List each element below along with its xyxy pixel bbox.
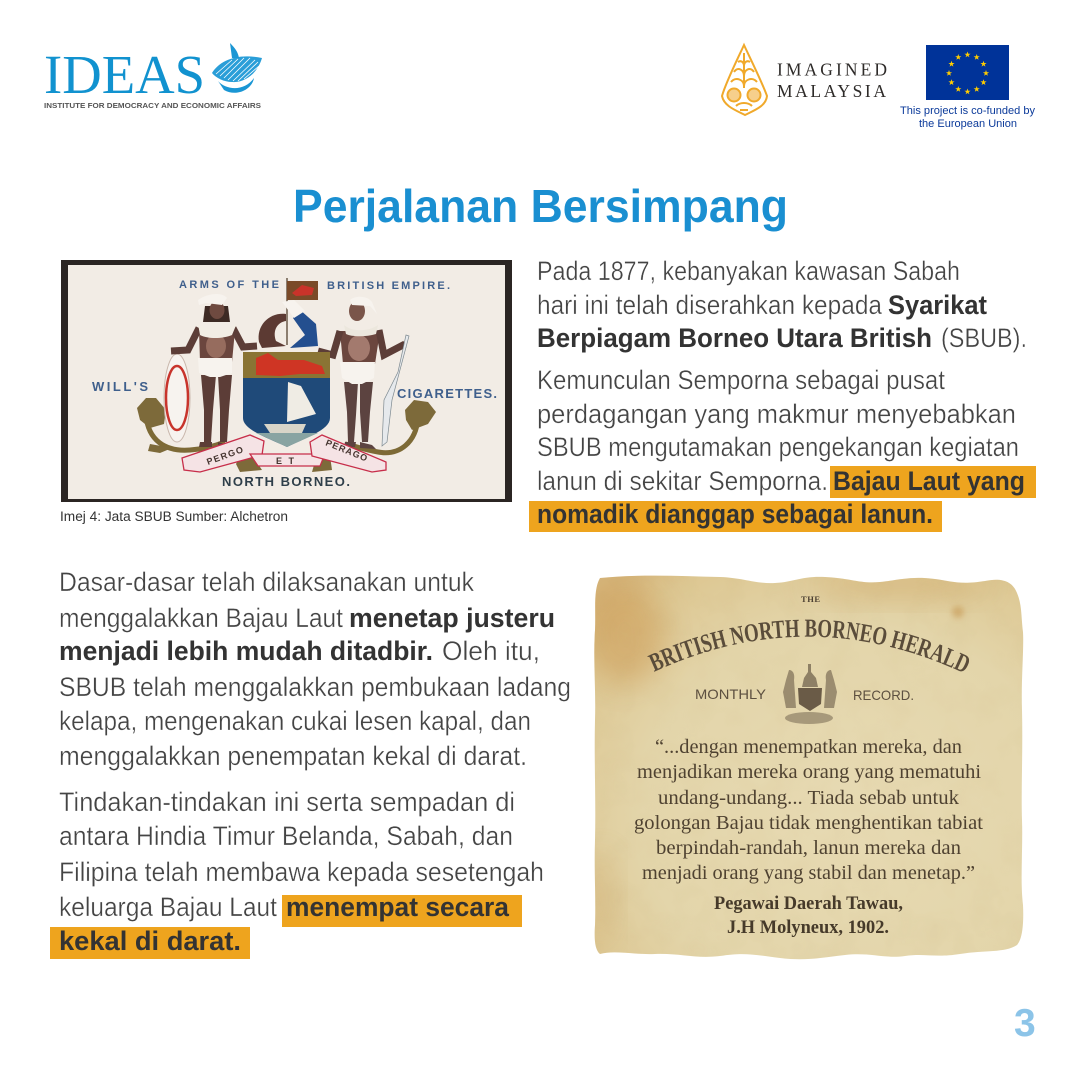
masthead: RECORD.	[853, 687, 914, 703]
masthead: MONTHLY	[695, 686, 767, 702]
text block: borders: Filipina telah membawa kepada sesetengah	[59, 857, 544, 887]
highlight: menempat secara kekal: kekal di darat.	[59, 926, 241, 956]
image: North Borneo coat of arms card: PERAGO	[324, 438, 369, 463]
lifebuoy shield	[164, 354, 190, 442]
icon: IDEAS bird	[212, 43, 262, 93]
quote attribution	[714, 893, 903, 938]
text block: Semporna	[529, 365, 1036, 532]
text block: SBUB charter: Berpiagam Borneo Utara British	[537, 323, 932, 353]
text block: policies: Dasar-dasar telah dilaksanakan untuk	[59, 567, 474, 597]
right figure	[318, 297, 405, 449]
text block: Semporna: lanun di sekitar Semporna.	[537, 466, 828, 496]
quote text	[634, 736, 983, 884]
text block: borders	[50, 787, 544, 959]
text block: borders: antara Hindia Timur Belanda, Sabah, dan	[59, 821, 513, 851]
masthead: THE	[801, 594, 820, 604]
text block: policies: kelapa, mengenakan cukai lesen kapal, dan	[59, 706, 531, 736]
text block: Semporna: SBUB mengutamakan pengekangan kegiatan	[537, 432, 1019, 462]
quote text: “...dengan menempatkan mereka, dan	[655, 736, 962, 758]
text block: policies: menggalakkan Bajau Laut	[59, 603, 343, 633]
quote text: golongan Bajau tidak menghentikan tabiat	[634, 812, 983, 834]
text block: SBUB charter: (SBUB).	[941, 323, 1027, 353]
logo: Imagined Malaysia: IMAGINED	[777, 60, 887, 80]
text block: policies: menetap justeru	[349, 603, 555, 633]
text block: SBUB charter: Pada 1877, kebanyakan kawasan Sabah	[537, 256, 960, 286]
text block: policies: menggalakkan penempatan kekal di darat.	[59, 741, 527, 771]
branches	[146, 415, 418, 453]
text block: SBUB charter: hari ini telah diserahkan kepada	[537, 290, 883, 320]
text block: borders: keluarga Bajau Laut	[59, 892, 277, 922]
highlight: menempat secara kekal	[50, 892, 522, 959]
image: North Borneo coat of arms card: ET	[276, 456, 294, 466]
logo: IDEAS: INSTITUTE FOR DEMOCRACY AND ECONOMIC AFFAIRS	[44, 101, 261, 110]
shield	[243, 352, 330, 447]
logo: IDEAS	[44, 43, 262, 110]
co-funding note: This project is co-funded by	[900, 105, 1036, 117]
sword	[382, 335, 409, 446]
highlight: Bajau Laut: nomadik dianggap sebagai lanun.	[537, 499, 933, 529]
image: North Borneo coat of arms card	[61, 260, 512, 502]
co-funding note	[900, 105, 1036, 130]
card text: NORTH BORNEO.	[222, 474, 350, 489]
card text	[92, 279, 497, 489]
logo: Imagined Malaysia: MALAYSIA	[777, 81, 886, 101]
highlight: Bajau Laut	[529, 466, 1036, 532]
text block: Semporna: Kemunculan Semporna sebagai pusat	[537, 365, 945, 395]
panel: newspaper quote	[594, 576, 1024, 960]
page number: 3	[1014, 1002, 1036, 1045]
masthead	[647, 594, 970, 724]
text block: policies: Oleh itu,	[442, 636, 540, 666]
image: North Borneo coat of arms card: PERGO	[205, 444, 244, 467]
text block: policies: SBUB telah menggalakkan pembukaan ladang	[59, 672, 571, 702]
left figure	[171, 294, 257, 449]
text block: policies: menjadi lebih mudah ditadbir.	[59, 636, 433, 666]
highlight: menempat secara kekal: menempat secara	[286, 892, 510, 922]
quote text: berpindah-randah, lanun mereka dan	[656, 837, 961, 859]
card text: BRITISH EMPIRE.	[327, 280, 450, 292]
text block: policies	[59, 567, 571, 771]
quote attribution: J.H Molyneux, 1902.	[727, 917, 889, 938]
card text: ARMS OF THE	[179, 279, 279, 291]
quote text: menjadi orang yang stabil dan menetap.”	[642, 862, 975, 884]
title: Perjalanan Bersimpang	[293, 180, 788, 232]
masthead: BRITISH NORTH BORNEO HERALD	[647, 620, 970, 672]
text block: SBUB charter	[537, 256, 1027, 353]
motto banner	[182, 435, 386, 472]
co-funding note: the European Union	[919, 118, 1017, 130]
flag and arms	[286, 278, 288, 345]
icon: gunungan	[722, 45, 767, 115]
logo: Imagined Malaysia	[722, 45, 887, 115]
text block: SBUB charter: Syarikat	[888, 290, 987, 320]
text block: Semporna: perdagangan yang makmur menyebabkan	[537, 399, 1016, 429]
quote attribution: Pegawai Daerah Tawau,	[714, 893, 903, 914]
logo: EU flag	[900, 45, 1036, 130]
text block: borders: Tindakan-tindakan ini serta sempadan di	[59, 787, 515, 817]
quote text: menjadikan mereka orang yang mematuhi	[637, 761, 981, 783]
caption: Imej 4: Jata SBUB Sumber: Alchetron	[60, 509, 288, 524]
icon: small crest	[783, 664, 837, 724]
card text: WILL'S	[92, 379, 148, 394]
quote text: undang-undang... Tiada sebab untuk	[658, 787, 959, 809]
card text: CIGARETTES.	[397, 386, 497, 401]
highlight: Bajau Laut: Bajau Laut yang	[833, 466, 1025, 496]
logo: IDEAS: IDEAS	[44, 44, 205, 105]
